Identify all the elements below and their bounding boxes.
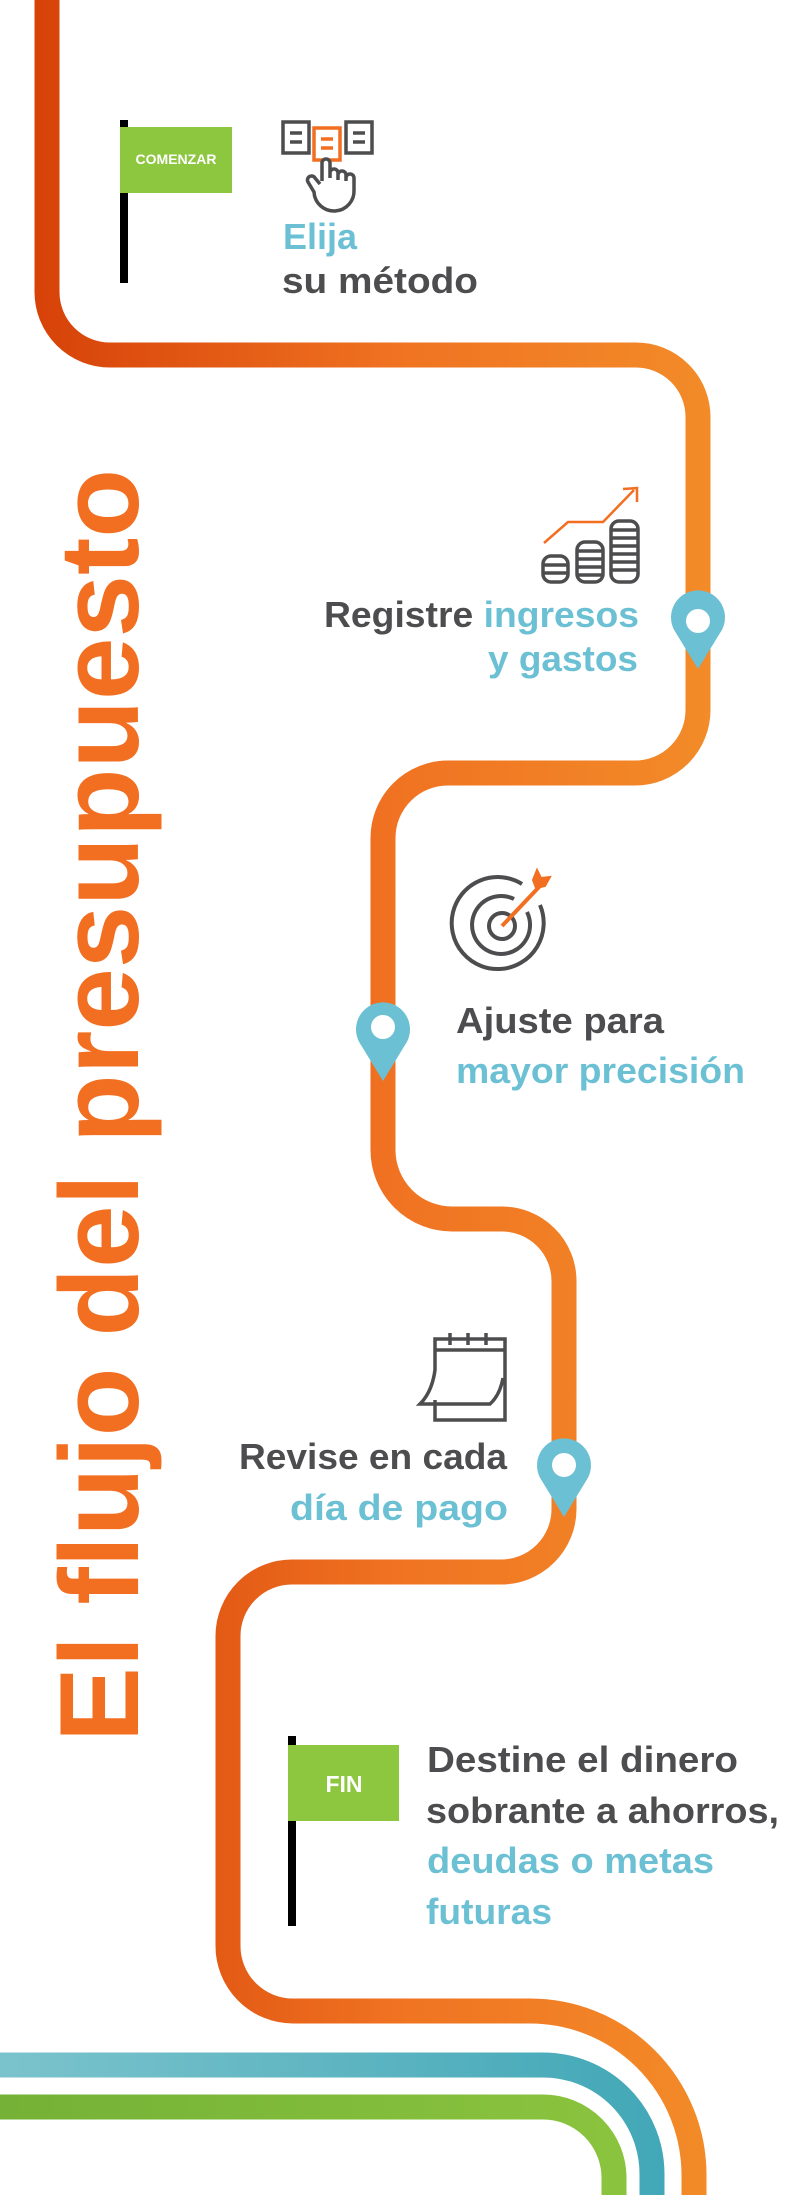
text: ajuste para mayor precision: mayor precisión [456, 1050, 745, 1091]
pin 3 [537, 1438, 591, 1517]
flag: fin [288, 1736, 399, 1926]
title: El flujo del presupuesto [37, 469, 162, 1742]
text: revise en cada dia de pago: Revise en cada [239, 1436, 508, 1477]
text: registre ingresos y gastos: Registre ingresos [324, 594, 639, 635]
text: elija su metodo [282, 216, 478, 301]
text: revise en cada dia de pago [239, 1436, 508, 1528]
blue line [0, 2065, 652, 2195]
green line [0, 2107, 614, 2195]
icon: choose method [283, 122, 372, 211]
flag: comenzar [120, 120, 232, 283]
flag: fin: FIN [325, 1771, 363, 1797]
text: destine el dinero: deudas o metas [427, 1840, 714, 1881]
icon: calendar [420, 1333, 505, 1420]
icon: target [452, 870, 550, 969]
flag: comenzar: COMENZAR [136, 151, 216, 167]
text: ajuste para mayor precision [456, 1000, 745, 1091]
text: elija su metodo: Elija [283, 216, 358, 257]
text: revise en cada dia de pago: día de pago [290, 1487, 508, 1528]
text: destine el dinero: Destine el dinero [427, 1739, 738, 1780]
text: elija su metodo: su método [282, 260, 478, 301]
icon: coins with arrow [543, 488, 638, 582]
pin 1 [671, 590, 725, 669]
text: registre ingresos y gastos: y gastos [488, 638, 638, 679]
text: destine el dinero: futuras [426, 1891, 552, 1932]
text: registre ingresos y gastos [324, 594, 639, 679]
pin 2 [356, 1002, 410, 1081]
text: ajuste para mayor precision: Ajuste para [456, 1000, 665, 1041]
text: destine el dinero [426, 1739, 779, 1932]
text: destine el dinero: sobrante a ahorros, [426, 1790, 779, 1831]
